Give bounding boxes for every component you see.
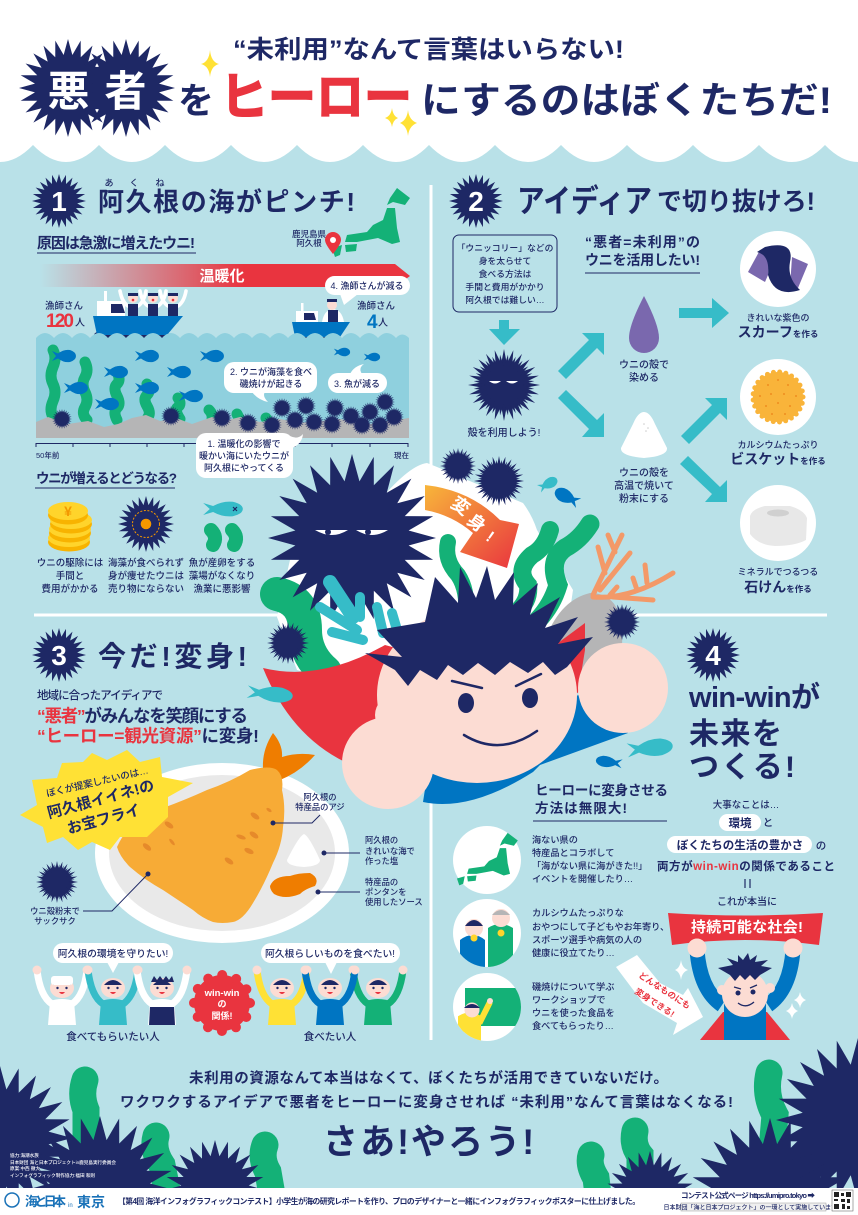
intro copy: 地域に合ったアイディアで bbox=[37, 688, 163, 702]
effects captions bbox=[37, 557, 255, 595]
henshin arrow bbox=[425, 485, 519, 568]
effects captions: 魚が産卵をする bbox=[189, 557, 255, 569]
effects captions: 海藻が食べられず bbox=[108, 557, 184, 569]
left fishermen count bbox=[45, 300, 85, 332]
badge 3 bbox=[32, 628, 86, 682]
white sparkles bbox=[675, 960, 806, 1019]
heading 2 bbox=[517, 183, 815, 219]
white arrow bbox=[616, 955, 703, 1035]
yellow starburst: お宝フライ bbox=[65, 802, 142, 838]
heading 3: 今だ!変身! bbox=[98, 641, 247, 672]
urchin powder note: ウニ殻粉末で bbox=[30, 906, 80, 916]
note box: 阿久根では難しい… bbox=[465, 294, 545, 305]
callout 1: 1. 温暖化の影響で bbox=[207, 438, 281, 449]
biscuit caption: カルシウムたっぷり bbox=[737, 440, 819, 450]
japan map with pin bbox=[292, 188, 410, 257]
effects captions: 費用がかかる bbox=[41, 583, 99, 595]
fish shoal bbox=[52, 348, 380, 410]
timeline labels: 現在 bbox=[394, 450, 409, 460]
QR code bbox=[832, 1190, 853, 1211]
label salt: 阿久根の bbox=[365, 835, 398, 845]
warming arrow bbox=[40, 264, 410, 287]
logo: 東京 bbox=[77, 1194, 105, 1210]
subheading ways: ヒーローに変身させる bbox=[535, 782, 668, 798]
title line two rest: にするのはぼくたちだ! bbox=[421, 80, 832, 121]
pill livelihood bbox=[667, 836, 826, 853]
biscuit caption bbox=[730, 440, 826, 467]
important text: 大事なことは… bbox=[713, 799, 779, 811]
callout 4: 4. 漁師さんが減る bbox=[330, 280, 404, 291]
red banner: 持続可能な社会! bbox=[691, 918, 803, 936]
bottom urchins bbox=[0, 1038, 858, 1210]
ruby bbox=[104, 178, 165, 188]
seaweed in sea bbox=[51, 350, 268, 421]
text: workshop bbox=[532, 981, 615, 1031]
dye caption: 染める bbox=[629, 371, 659, 384]
text: snacks: スポーツ選手や病気の人の bbox=[532, 934, 642, 945]
effects captions: 身が痩せたウニは bbox=[108, 570, 184, 582]
label sauce: 使用したソース bbox=[365, 897, 423, 907]
note box bbox=[453, 235, 557, 312]
product circle: biscuit bbox=[740, 359, 816, 435]
producers group bbox=[32, 966, 192, 1025]
label salt bbox=[322, 835, 415, 866]
callout 1 bbox=[196, 433, 303, 478]
scarf caption: スカーフを作る bbox=[738, 324, 818, 340]
seabed bbox=[36, 415, 409, 438]
speech bubble right bbox=[261, 943, 400, 974]
label horse mackerel bbox=[270, 792, 345, 826]
hero suit bbox=[423, 695, 628, 804]
orange coral bbox=[593, 535, 673, 600]
panel: section 2 bbox=[449, 174, 826, 595]
text: map: イベントを開催したり… bbox=[532, 873, 633, 884]
circle: snacks bbox=[453, 899, 521, 968]
foundation note box: 日本財団「海と日本プロジェクト」の一環として実施しています。 bbox=[663, 1204, 843, 1212]
hero face bbox=[375, 607, 577, 783]
badge 3: 3 bbox=[51, 640, 67, 671]
title word hero: ヒーロー bbox=[220, 69, 412, 126]
win-win badge: win-win bbox=[204, 988, 240, 999]
heading 4: win-winが bbox=[688, 680, 820, 714]
timeline labels: 50年前 bbox=[36, 450, 60, 460]
powder caption: 高温で焼いて bbox=[614, 479, 674, 492]
credit lines: インフォグラフィック制作協力:福田 和則 bbox=[10, 1172, 95, 1179]
powder caption: 粉末にする bbox=[619, 492, 669, 505]
effects captions: ウニの駆除には bbox=[37, 557, 104, 569]
icon: sparkles bbox=[201, 50, 417, 136]
effects captions: 手間と bbox=[56, 570, 84, 582]
closing message bbox=[120, 1069, 733, 1162]
win-win badge bbox=[194, 975, 250, 1031]
left fishermen count: 漁師さん bbox=[45, 300, 83, 312]
dividers bbox=[34, 185, 827, 1040]
hero expression bbox=[452, 674, 541, 745]
ruby: く bbox=[129, 178, 139, 188]
yellow starburst: ぼくが提案したいのは… bbox=[45, 764, 150, 800]
right fishermen count: 4 bbox=[367, 312, 378, 333]
text: map: 海ない県の bbox=[532, 834, 578, 845]
dye caption bbox=[619, 358, 669, 384]
win-win sentence: 両方がwin-winの関係であること bbox=[657, 859, 835, 873]
product circle: scarf bbox=[740, 231, 816, 307]
closing line two: ワクワクするアイデアで悪者をヒーローに変身させれば “未利用”なんて言葉はなくなる! bbox=[120, 1093, 733, 1111]
text: workshop: 磯焼けについて学ぶ bbox=[532, 981, 614, 992]
powder caption bbox=[614, 466, 674, 505]
callout 1: 阿久根にやってくる bbox=[204, 462, 284, 473]
note box: 食べる方法は bbox=[479, 268, 532, 279]
scarf caption bbox=[738, 312, 818, 340]
icon: powder bbox=[621, 412, 667, 458]
logo bbox=[5, 1193, 105, 1210]
icon: coins: ¥ bbox=[64, 503, 72, 519]
red banner bbox=[668, 913, 823, 945]
title word villain: 悪者 bbox=[48, 68, 146, 115]
subheading ways bbox=[533, 782, 668, 821]
title urchin badge bbox=[19, 39, 175, 137]
soap caption: 石けんを作る bbox=[744, 579, 812, 595]
logo: in bbox=[68, 1203, 73, 1209]
speech bubble left: 阿久根の環境を守りたい! bbox=[58, 947, 168, 960]
plate bbox=[95, 763, 349, 943]
ruby: ね bbox=[155, 178, 165, 188]
text: workshop: ワークショップで bbox=[532, 995, 606, 1005]
urchin powder note bbox=[30, 861, 150, 926]
biscuit caption: ビスケットを作る bbox=[730, 451, 826, 467]
left fishermen count: 120 bbox=[46, 311, 74, 332]
footer bbox=[0, 1188, 858, 1215]
credit lines bbox=[10, 1152, 116, 1179]
timeline labels bbox=[36, 450, 409, 460]
japan map with pin: 阿久根 bbox=[296, 238, 322, 248]
scarf caption: きれいな紫色の bbox=[746, 312, 810, 323]
label sauce: 特産品の bbox=[365, 877, 398, 887]
text: map: 特産品とコラボして bbox=[532, 847, 614, 858]
text: snacks: カルシウムたっぷりな bbox=[532, 908, 624, 918]
label horse mackerel: 特産品のアジ bbox=[295, 802, 345, 812]
powder caption: ウニの殻を bbox=[619, 466, 669, 479]
swimming fish upper bbox=[537, 475, 674, 769]
central hero illustration bbox=[247, 448, 674, 809]
bottom seaweed bbox=[83, 1073, 775, 1195]
credit lines: 協力:海潮水族 bbox=[10, 1152, 39, 1159]
intro copy bbox=[37, 688, 259, 746]
idea heading: “悪者=未利用”の bbox=[585, 234, 700, 250]
text: workshop: ウニを使った食品を bbox=[532, 1007, 615, 1018]
badge 1: 1 bbox=[51, 186, 67, 217]
text: workshop: 食べてもらったり… bbox=[532, 1020, 614, 1031]
teal coral bbox=[320, 582, 400, 640]
dye caption: ウニの殻で bbox=[619, 358, 669, 371]
text: snacks: 健康に役立てたり… bbox=[532, 947, 615, 958]
fried shrimp tail bbox=[263, 733, 315, 780]
text: snacks: おやつにして子どもやお年寄り、 bbox=[532, 921, 669, 932]
callout 2: 2. ウニが海藻を食べ bbox=[230, 366, 312, 377]
heading 4 bbox=[688, 680, 820, 784]
effects captions: 漁業に悪影響 bbox=[193, 583, 251, 595]
yellow starburst: 阿久根イイネ!の bbox=[45, 776, 156, 822]
seaweed bbox=[277, 524, 590, 672]
right boat bbox=[292, 299, 350, 340]
hero hair bbox=[365, 566, 593, 686]
right fishermen count bbox=[357, 300, 395, 333]
left boat bbox=[93, 291, 186, 340]
circle: map bbox=[453, 826, 521, 894]
panel: section 4 bbox=[453, 628, 835, 1041]
consumers caption: 食べたい人 bbox=[304, 1030, 357, 1043]
sea cross-section bbox=[36, 333, 409, 438]
subheading cause: 原因は急激に増えたウニ! bbox=[37, 234, 195, 252]
callout 1: 暖かい海にいたウニが bbox=[199, 450, 289, 461]
panel: section 3 bbox=[20, 628, 423, 1043]
urchin with eyes bbox=[468, 349, 540, 421]
intro copy: “悪者”がみんなを笑顔にする bbox=[37, 706, 248, 726]
text: map bbox=[532, 834, 647, 884]
callout 2 bbox=[224, 362, 317, 402]
label sauce bbox=[316, 877, 423, 907]
icon: coins bbox=[48, 502, 92, 552]
text: snacks bbox=[532, 908, 669, 958]
note box: 手間と費用がかかり bbox=[465, 281, 545, 292]
pill environment: 環境 bbox=[728, 817, 752, 830]
badge 1 bbox=[32, 174, 86, 228]
ruby: あ bbox=[104, 178, 114, 188]
yellow starburst bbox=[20, 750, 193, 850]
small hero bbox=[688, 938, 802, 1040]
fried shrimp bbox=[117, 768, 284, 923]
closing line one: 未利用の資源なんて本当はなくて、ぼくたちが活用できていないだけ。 bbox=[189, 1069, 668, 1087]
label salt: きれいな海で bbox=[365, 846, 415, 856]
label salt: 作った塩 bbox=[365, 856, 399, 866]
panel: section 1 bbox=[32, 174, 410, 595]
soap caption bbox=[738, 567, 818, 595]
urchins on seabed bbox=[52, 392, 404, 435]
grey rock bbox=[545, 593, 622, 680]
white burst backdrop bbox=[277, 463, 573, 700]
badge 2: 2 bbox=[468, 186, 484, 217]
lead to banner: これが本当に bbox=[717, 895, 777, 908]
title line two particle: を bbox=[178, 80, 214, 121]
heading 4: 未来を bbox=[689, 718, 782, 751]
urchin caption: 殻を利用しよう! bbox=[468, 426, 540, 439]
small urchins bbox=[267, 448, 640, 664]
speech bubble left bbox=[53, 943, 173, 973]
idea heading: ウニを活用したい! bbox=[585, 252, 700, 268]
henshin arrow: ! bbox=[483, 529, 497, 546]
bottom decoration bbox=[0, 1038, 858, 1210]
hero cape bbox=[263, 623, 585, 765]
pill environment bbox=[719, 814, 773, 831]
hero fists bbox=[342, 643, 668, 809]
speech bubble right: 阿久根らしいものを食べたい! bbox=[265, 947, 395, 960]
credit lines: 原案:中西 徹大 bbox=[10, 1165, 41, 1172]
icon: thin urchin bbox=[118, 496, 174, 552]
heading 1: 阿久根の海がピンチ! bbox=[98, 187, 355, 217]
sauce bbox=[270, 873, 317, 897]
contest description: 【第4回 海洋インフォグラフィックコンテスト】小学生が海の研究レポートを作り、プロのデザイナーと一緒にインフォグラフィックポスターに仕上げました。 bbox=[118, 1196, 640, 1206]
title line one: “未利用”なんて言葉はいらない! bbox=[233, 36, 624, 64]
villain urchin bbox=[268, 454, 436, 622]
timeline axis bbox=[36, 444, 408, 447]
logo: 海と日本 bbox=[25, 1194, 66, 1209]
white arrow: 変身できる! bbox=[633, 986, 676, 1019]
note box: 「ウニッコリー」などの bbox=[457, 243, 554, 253]
arrow down bbox=[489, 320, 520, 345]
idea heading bbox=[585, 234, 700, 273]
henshin arrow: 変 bbox=[447, 493, 474, 519]
warming arrow: 温暖化 bbox=[199, 268, 245, 285]
pill livelihood: ぼくたちの生活の豊かさ bbox=[677, 838, 803, 852]
win-win badge: の bbox=[217, 999, 227, 1009]
heading 4: つくる! bbox=[689, 751, 795, 784]
pill environment: と bbox=[763, 817, 773, 829]
badge 4: 4 bbox=[705, 640, 721, 671]
win-win badge: 関係! bbox=[212, 1010, 233, 1021]
left fishermen count: 人 bbox=[75, 318, 85, 329]
callout 4 bbox=[325, 276, 410, 305]
footer background bbox=[0, 1188, 858, 1215]
callout 3: 3. 魚が減る bbox=[334, 378, 380, 389]
product circle: soap bbox=[740, 485, 816, 561]
label horse mackerel: 阿久根の bbox=[303, 792, 337, 802]
japan map with pin: 鹿児島県 bbox=[292, 229, 326, 239]
right fishermen count: 漁師さん bbox=[357, 300, 395, 312]
icon: dye drop bbox=[629, 296, 659, 353]
credit lines: 日本財団 海と日本プロジェクトin鹿児島実行委員会 bbox=[10, 1159, 116, 1166]
call to action: さあ!やろう! bbox=[323, 1123, 534, 1162]
intro copy: “ヒーロー=観光資源”に変身! bbox=[37, 726, 259, 746]
henshin arrow: 身 bbox=[463, 510, 490, 536]
callout 2: 磯焼けが起きる bbox=[240, 378, 302, 389]
icon: fish and seaweed bbox=[203, 502, 243, 545]
producers caption: 食べてもらいたい人 bbox=[66, 1030, 160, 1043]
note box: 身を太らせて bbox=[479, 255, 531, 266]
soap caption: ミネラルでつるつる bbox=[738, 567, 818, 577]
circle: workshop bbox=[453, 973, 525, 1041]
text: map: 「海がない県に海がきた!!」 bbox=[532, 860, 647, 871]
subheading ways: 方法は無限大! bbox=[535, 800, 627, 816]
consumers group bbox=[252, 966, 408, 1025]
title bbox=[19, 36, 832, 137]
teal fish on cape bbox=[247, 684, 293, 704]
subheading effects: ウニが増えるとどうなる? bbox=[36, 470, 177, 486]
badge 2 bbox=[449, 174, 503, 228]
urchin powder note: サックサク bbox=[34, 916, 76, 926]
callout 3 bbox=[328, 364, 387, 393]
equals bbox=[745, 879, 750, 888]
badge 4 bbox=[686, 628, 740, 682]
label sauce: ポンタンを bbox=[365, 887, 406, 897]
arrows bbox=[558, 298, 729, 502]
pill livelihood: の bbox=[816, 840, 826, 852]
heading 2: で切り抜けろ! bbox=[657, 188, 815, 216]
heading 2: アイディア bbox=[517, 183, 652, 219]
contest url: コンテスト公式ページ https://umipro.tokyo ➡ bbox=[681, 1190, 816, 1200]
white arrow: どんなものにも bbox=[637, 970, 692, 1011]
salt bbox=[287, 834, 320, 867]
right fishermen count: 人 bbox=[378, 318, 388, 329]
effects captions: 売り物にならない bbox=[108, 583, 184, 595]
effects captions: 藻場がなくなり bbox=[189, 570, 255, 582]
